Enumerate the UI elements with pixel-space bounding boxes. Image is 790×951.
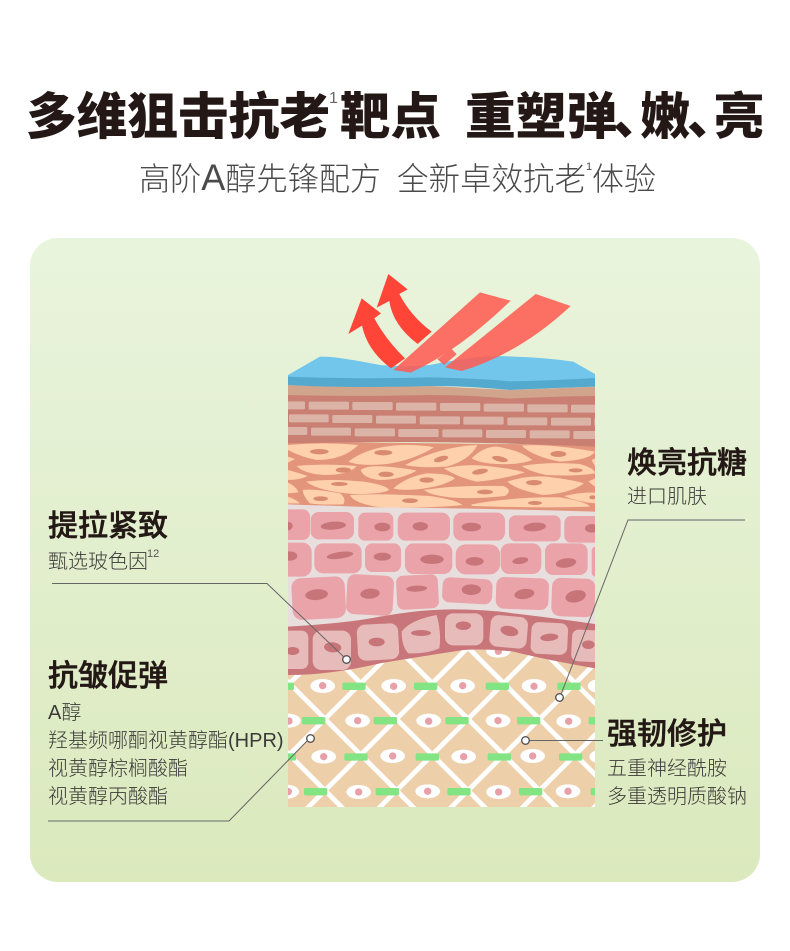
- subtitle: 全新卓效抗老: [397, 161, 586, 197]
- callout: brighten anti-glycation: 焕亮抗糖: [627, 447, 747, 480]
- tan band: [288, 385, 595, 399]
- callout: brighten anti-glycation: [556, 447, 747, 701]
- title: 1: [329, 90, 338, 107]
- title: 靶点: [340, 89, 441, 145]
- callout: lift and firm: 提拉紧致: [48, 510, 168, 543]
- wavy basal cell layer: [277, 609, 602, 675]
- callout: anti-wrinkle: 视黄醇棕榈酸酯: [48, 757, 188, 780]
- blue surface layer: [288, 356, 595, 390]
- title: 嫩: [640, 89, 690, 145]
- dermis lattice layer: [288, 650, 595, 807]
- eyes: [288, 650, 595, 799]
- title: 多维狙击抗老: [26, 89, 330, 145]
- callout: strengthen and repair: 多重透明质酸钠: [607, 785, 747, 808]
- callout: strengthen and repair: 五重神经酰胺: [607, 757, 727, 780]
- callout: anti-wrinkle: A醇: [48, 701, 81, 724]
- title: 、: [687, 89, 737, 145]
- salmon cell layer: [288, 442, 596, 512]
- callout: brighten anti-glycation: 进口肌肤: [627, 485, 707, 508]
- title: 重塑弹: [465, 89, 617, 145]
- callout: lift and firm: 12: [147, 548, 159, 560]
- callout: strengthen and repair: [522, 718, 747, 808]
- light beams: [393, 292, 571, 373]
- epidermis pink cells layer: [288, 504, 595, 626]
- title: 、: [613, 89, 663, 145]
- callout: strengthen and repair: 强韧修护: [607, 718, 727, 751]
- panel: green background card: [30, 238, 760, 882]
- title: 亮: [714, 89, 764, 145]
- callout: anti-wrinkle: 抗皱促弹: [48, 660, 168, 693]
- callout: lift and firm: [48, 510, 350, 663]
- subtitle: 高阶A醇先锋配方: [139, 157, 381, 198]
- green bars: [288, 682, 595, 796]
- callout: lift and firm: 甄选玻色因: [48, 550, 148, 573]
- skin cross-section diagram: [288, 274, 595, 807]
- callout: anti-wrinkle: [48, 660, 314, 821]
- arrow: red left: [348, 298, 405, 368]
- brick layer: [283, 393, 601, 447]
- subtitle: 体验: [592, 161, 656, 197]
- subtitle: 1: [586, 161, 592, 173]
- callout: anti-wrinkle: 羟基频哪酮视黄醇酯(HPR): [48, 729, 284, 752]
- subtitle: [139, 157, 656, 198]
- callout: anti-wrinkle: 视黄醇丙酸酯: [48, 785, 168, 808]
- arrow: red right: [377, 274, 432, 344]
- title: [26, 89, 764, 145]
